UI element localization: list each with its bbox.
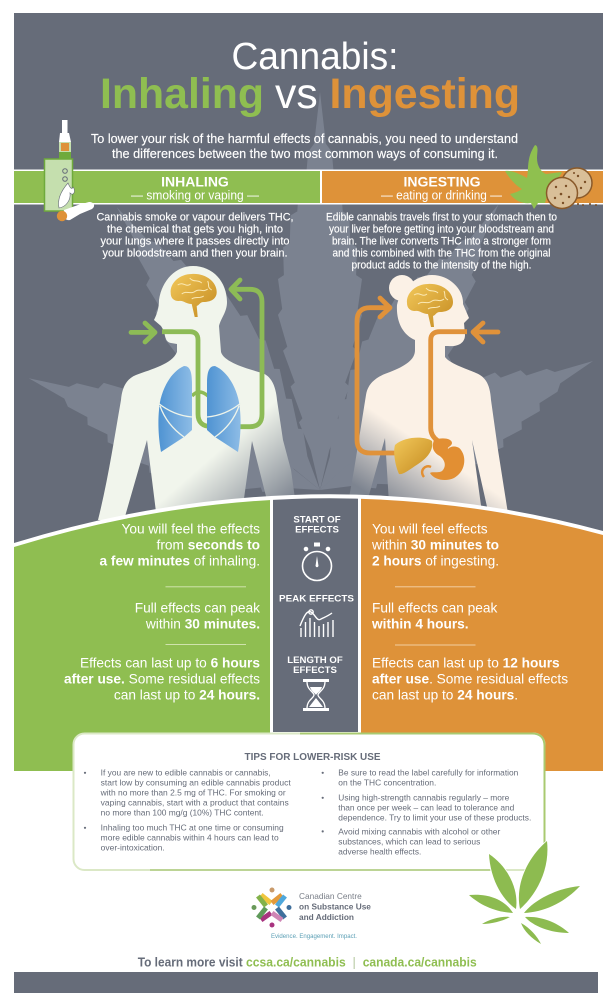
panel: inhaling effects: Full effects can peak: [135, 600, 260, 615]
title: Inhaling: [100, 70, 264, 118]
inhaling description: [96, 212, 294, 260]
inhaling description: your lungs where it passes directly into: [100, 236, 290, 248]
logo wordmark: Canadian Centre: [299, 891, 362, 901]
panel: inhaling effects: can last up to 24 hours.: [114, 687, 260, 702]
intro text: [91, 132, 518, 161]
background cannabis leaf: [13, 92, 612, 532]
ingesting description: [326, 212, 557, 272]
title: [100, 36, 520, 118]
logo: Canadian Centre on Substance Use and Addiction: Evidence. Engagement. Impact.: [271, 934, 357, 940]
panel: inhaling effects: a few minutes of inhaling.: [99, 554, 260, 569]
panel: ingesting effects: Full effects can peak: [372, 600, 497, 615]
panel: ingesting effects: after use. Some residual effects: [372, 671, 568, 686]
panel: ingesting effects: You will feel effects: [372, 521, 488, 536]
footer link line: [138, 955, 477, 970]
panel: ingesting effects: within 4 hours.: [371, 616, 469, 631]
intro text: To lower your risk of the harmful effects of cannabis, you need to understand: [91, 132, 518, 146]
icon: lungs: [158, 366, 241, 452]
tips right column: dependence. Try to limit your use of these products.: [338, 813, 531, 823]
lower panel: curved divider: [14, 494, 603, 771]
tips right column: adverse health effects.: [338, 846, 421, 856]
panel: inhaling effects: Effects can last up to 6 hours: [80, 655, 260, 670]
ingesting description: your liver before getting into your bloodstream and: [329, 224, 554, 236]
band: inhaling: — smoking or vaping —: [131, 188, 259, 202]
icon: brain: [407, 284, 453, 327]
tips left column: Inhaling too much THC at one time or consuming: [101, 823, 284, 833]
panel: ingesting effects: [361, 490, 603, 771]
digestive arrows: [357, 298, 498, 453]
airflow arrows: [131, 280, 262, 427]
panel: effects timeline: EFFECTS: [293, 665, 337, 676]
panel: inhaling effects: after use. Some residual effects: [64, 671, 260, 686]
intro text: the differences between the two most common ways of consuming it.: [112, 147, 498, 161]
icon: peak chart: [300, 610, 333, 637]
icon: liver: [394, 438, 432, 474]
panel: ingesting effects: Effects can last up to 12 hours: [372, 655, 560, 670]
panel: inhaling effects: [14, 490, 270, 771]
panel: ingesting effects: 2 hours of ingesting.: [372, 554, 499, 569]
background panel: [14, 13, 603, 771]
ingesting description: Edible cannabis travels first to your stomach then to: [326, 212, 557, 224]
female figure with digestive organs: [345, 275, 509, 520]
band: ingesting: [320, 170, 603, 204]
logo: Canadian Centre on Substance Use and Addiction: and Addiction: [299, 912, 354, 922]
tips right column: Be sure to read the label carefully for information: [338, 768, 519, 778]
title: vs: [275, 70, 318, 118]
band: ingesting: INGESTING: [403, 174, 481, 190]
tips left column: with no more than 2.5 mg of THC. For smoking or: [100, 788, 286, 798]
band: inhaling: INHALING: [161, 174, 229, 190]
tips left column: start low by consuming an edible cannabis product: [101, 778, 291, 788]
title: Cannabis:: [232, 36, 398, 78]
panel: tips: [74, 734, 544, 870]
title: Ingesting: [330, 70, 520, 118]
panel: ingesting effects: within 30 minutes to: [371, 537, 499, 552]
panel: effects timeline: START OF: [293, 515, 341, 526]
logo mark: [258, 895, 285, 920]
footer bar: [14, 972, 598, 993]
icon: green cannabis leaf: [469, 841, 580, 944]
tips right column: Avoid mixing cannabis with alcohol or other: [338, 826, 501, 836]
inhaling description: the chemical that gets you high, into: [107, 224, 283, 236]
tips right column: than once per week – can lead to tolerance and: [338, 803, 515, 813]
tips left column: over-intoxication.: [101, 843, 165, 853]
footer link line: canada.ca/cannabis: [363, 955, 477, 970]
tips left column: If you are new to edible cannabis or cannabis,: [101, 768, 271, 778]
icon: stopwatch: [302, 542, 332, 580]
ingesting description: product adds to the intensity of the high.: [352, 260, 532, 272]
icon: vape and joint: [44, 120, 94, 221]
tips left column: vaping cannabis, start with a product that contains: [101, 798, 289, 808]
icon: hourglass: [303, 679, 329, 711]
tips right column: [322, 768, 531, 856]
inhaling description: your bloodstream and then your brain.: [102, 248, 288, 260]
footer link line: |: [352, 955, 356, 970]
icon: stomach: [422, 438, 464, 480]
tips left column: more edible cannabis within 4 hours can lead to: [101, 833, 279, 843]
tips right column: on the THC concentration.: [338, 778, 436, 788]
ingesting description: and this combined with the THC from the original: [332, 248, 550, 260]
panel: inhaling effects: within 30 minutes.: [145, 616, 260, 631]
panel: inhaling effects: from seconds to: [157, 537, 260, 552]
icon: leaf and cookies: [505, 145, 597, 209]
inhaling description: Cannabis smoke or vapour delivers THC,: [96, 212, 294, 224]
panel: effects timeline: EFFECTS: [295, 525, 339, 536]
icon: brain: [171, 274, 217, 317]
ingesting description: brain. The liver converts THC into a stronger form: [332, 236, 551, 248]
panel: effects timeline: LENGTH OF: [287, 655, 343, 666]
panel: effects timeline: [273, 490, 358, 732]
footer link line: ccsa.ca/cannabis: [246, 955, 346, 970]
footer link line: To learn more visit: [138, 955, 243, 970]
male figure with lungs: [98, 266, 298, 520]
logo: Canadian Centre on Substance Use and Addiction: on Substance Use: [299, 901, 371, 911]
panel: ingesting effects: can last up to 24 hours.: [372, 687, 518, 702]
band: ingesting: — eating or drinking —: [381, 188, 502, 202]
logo: Canadian Centre on Substance Use and Addiction: [252, 888, 371, 940]
tips left column: [84, 768, 291, 853]
tips right column: substances, which can lead to serious: [338, 836, 480, 846]
panel: effects timeline: PEAK EFFECTS: [279, 594, 355, 605]
tips right column: Using high-strength cannabis regularly – more: [338, 793, 510, 803]
band: inhaling: [14, 170, 320, 204]
panel: inhaling effects: You will feel the effects: [122, 521, 260, 536]
heading: TIPS FOR LOWER-RISK USE: [244, 752, 381, 763]
tips left column: no more than 100 mg/g (10%) THC content.: [101, 808, 264, 818]
